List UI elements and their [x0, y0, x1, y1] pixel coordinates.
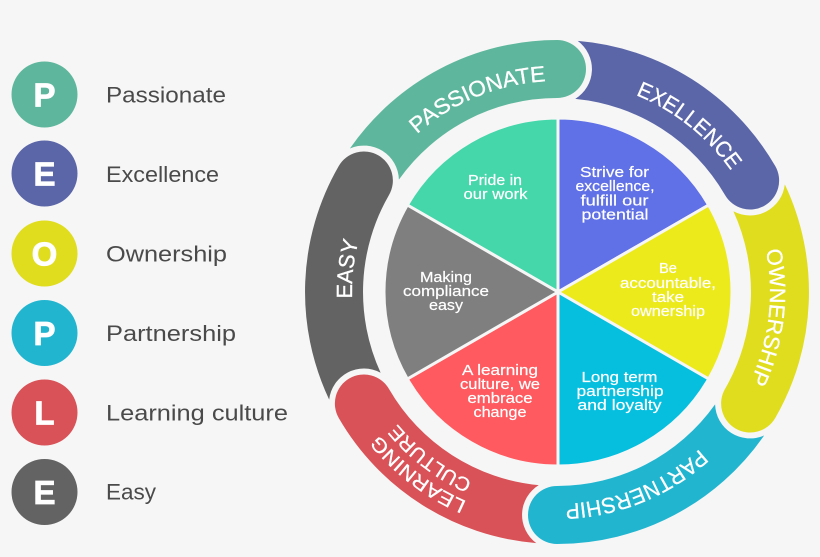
- pie slice: A learning culture: A learning: [462, 362, 538, 379]
- legend item: Easy: E: [33, 474, 56, 511]
- ring segment: Partnership: [528, 404, 764, 544]
- pie slice: Strive for excellence: potential: [582, 206, 648, 224]
- pie slice: Long term partnership: Long term: [582, 369, 658, 386]
- ring label: EXELLENCE: EXELLENCE: [637, 82, 742, 170]
- pie slice: Long term partnership: partnership: [576, 383, 664, 400]
- legend item: Easy: Easy: [106, 480, 156, 504]
- legend item: Passionate: P: [33, 76, 56, 114]
- ring segment: Easy: [305, 151, 393, 400]
- legend item: Ownership: Ownership: [106, 242, 227, 266]
- legend item: Learning culture: [12, 380, 288, 446]
- outer ring: [305, 40, 809, 544]
- ring label: PASSIONATE: PASSIONATE: [408, 66, 546, 134]
- legend item: Passionate: [12, 62, 226, 128]
- pie slice: A learning culture: culture, we: [460, 376, 540, 393]
- pie slice: Be accountable: accountable,: [620, 275, 716, 292]
- pie slice: Pride in our work: Pride in: [468, 172, 522, 189]
- pie slice: Making compliance easy: [384, 205, 558, 379]
- pie slice: Making compliance easy: compliance: [403, 283, 489, 300]
- ring label: PARTNERSHIP: PARTNERSHIP: [566, 450, 708, 519]
- pie slice: Be accountable: take: [652, 289, 684, 306]
- ring segment: Exellence: [575, 41, 779, 210]
- legend item: Passionate: Passionate: [106, 83, 226, 108]
- pie slice: Be accountable: [558, 205, 732, 379]
- pie slice: Be accountable: ownership: [631, 303, 705, 320]
- legend item: Excellence: E: [33, 156, 56, 192]
- legend: people values: [12, 62, 288, 525]
- legend item: Partnership: P: [33, 315, 56, 352]
- pie slice: A learning culture: [407, 292, 558, 466]
- ring label: OWNERSHIP: OWNERSHIP: [754, 250, 786, 386]
- ring label: EASY: EASY: [336, 238, 358, 297]
- pie slice: A learning culture: embrace: [468, 390, 532, 407]
- legend item: Partnership: Partnership: [106, 321, 236, 346]
- pie slice: Strive for excellence: excellence,: [576, 178, 654, 195]
- legend item: Partnership: [12, 300, 236, 366]
- ring label: CULTURE: CULTURE: [388, 424, 470, 491]
- pie slice: Pride in our work: our work: [464, 186, 528, 203]
- legend item: Ownership: [12, 220, 227, 286]
- legend item: Excellence: Excellence: [106, 162, 219, 187]
- pie slice: Making compliance easy: easy: [429, 297, 464, 314]
- ring label: LEARNING: LEARNING: [372, 437, 466, 514]
- ring segment: Learning culture: [335, 375, 539, 543]
- legend item: Learning culture: L: [34, 394, 55, 432]
- pie slice: A learning culture: change: [474, 404, 526, 421]
- pie slice: Strive for excellence: Strive for: [580, 164, 649, 181]
- pie slice: Pride in our work: [407, 118, 558, 292]
- legend item: Learning culture: Learning culture: [106, 400, 288, 426]
- pie slice: Strive for excellence: [558, 118, 709, 292]
- legend item: Excellence: [12, 140, 219, 206]
- pie chart: [384, 118, 732, 466]
- legend item: Easy: [12, 459, 156, 525]
- ring segment: Passionate: [350, 40, 586, 180]
- ring segment: Ownership: [721, 184, 809, 432]
- pie slice: Strive for excellence: fulfill our: [580, 192, 648, 210]
- pie slice: Long term partnership: [558, 292, 709, 466]
- legend item: Ownership: O: [32, 236, 57, 272]
- pie slice: Making compliance easy: Making: [420, 269, 472, 286]
- pie slice: Long term partnership: and loyalty: [578, 397, 662, 414]
- pie slice: Be accountable: Be: [659, 260, 677, 277]
